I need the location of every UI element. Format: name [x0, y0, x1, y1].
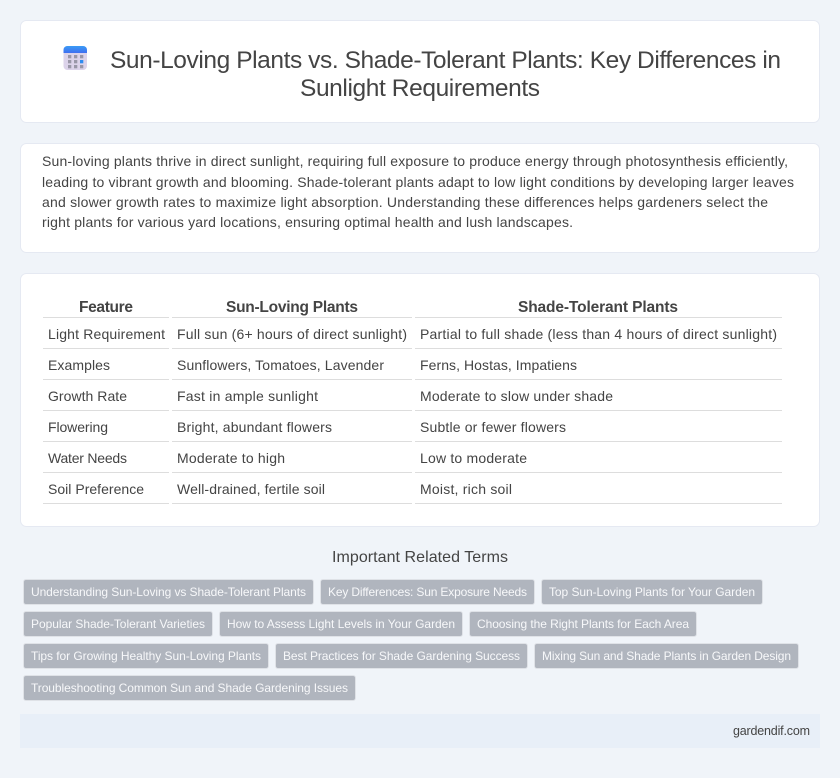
tag: Mixing Sun and Shade Plants in Garden Design — [542, 649, 791, 663]
tag — [320, 580, 534, 604]
icon: calendar — [64, 46, 87, 70]
panel: header — [20, 20, 820, 122]
tag: How to Assess Light Levels in Your Garden — [227, 617, 455, 631]
row: soil preference: Moist, rich soil — [420, 481, 512, 497]
row: light requirement: Partial to full shade (less than 4 hours of direct sunlight) — [420, 326, 777, 342]
row: flowering: Subtle or fewer flowers — [420, 419, 566, 435]
table header: Feature — [79, 299, 133, 316]
tag — [220, 612, 462, 636]
tag — [24, 676, 356, 700]
title: Sunlight Requirements — [300, 75, 540, 102]
tag: Understanding Sun-Loving vs Shade-Tolerant Plants — [31, 585, 306, 599]
row: flowering: Bright, abundant flowers — [177, 419, 332, 435]
row: light requirement: Light Requirement — [48, 326, 165, 342]
tag: Popular Shade-Tolerant Varieties — [31, 617, 205, 631]
title: Sun-Loving Plants vs. Shade-Tolerant Plants: Key Differences in — [110, 47, 781, 74]
title — [110, 47, 781, 102]
table header: Shade-Tolerant Plants — [518, 299, 678, 316]
related term tags — [24, 580, 798, 700]
row: growth rate — [48, 388, 613, 404]
tag — [542, 580, 762, 604]
row: growth rate: Fast in ample sunlight — [177, 388, 318, 404]
row: soil preference: Well-drained, fertile soil — [177, 481, 325, 497]
tag — [276, 644, 528, 668]
row: soil preference — [48, 481, 512, 497]
tag — [24, 580, 314, 604]
tag: Key Differences: Sun Exposure Needs — [328, 585, 527, 599]
row: water needs: Water Needs — [48, 450, 127, 466]
text block: introduction: and slower growth rates to maximize light absorption. Understanding these differences helps gardeners select the — [42, 194, 768, 210]
panel: comparison table — [20, 274, 820, 526]
row: examples: Examples — [48, 357, 110, 373]
tag: Troubleshooting Common Sun and Shade Gardening Issues — [31, 681, 348, 695]
row: water needs: Moderate to high — [177, 450, 285, 466]
footer — [20, 714, 820, 748]
tag: Choosing the Right Plants for Each Area — [477, 617, 689, 631]
row: growth rate: Moderate to slow under shade — [420, 388, 613, 404]
row: growth rate: Growth Rate — [48, 388, 127, 404]
tag — [24, 612, 212, 636]
text block: introduction: leading to vibrant growth and blooming. Shade-tolerant plants adapt to low light conditions by developing larger leaves — [42, 174, 794, 190]
row: water needs — [48, 450, 527, 466]
row: examples — [48, 357, 577, 373]
text block: introduction: right plants for various yard locations, ensuring optimal health and lush landscapes. — [42, 214, 573, 230]
row: light requirement — [48, 326, 777, 342]
table header: Sun-Loving Plants — [226, 299, 358, 316]
text block: introduction: Sun-loving plants thrive in direct sunlight, requiring full exposure to produce energy through photosynthesis efficiently, — [42, 153, 788, 169]
tag — [534, 644, 798, 668]
row: flowering — [48, 419, 566, 435]
row: examples: Ferns, Hostas, Impatiens — [420, 357, 577, 373]
panel: introduction — [20, 144, 820, 252]
tag: Best Practices for Shade Gardening Success — [283, 649, 520, 663]
footer: gardendif.com — [733, 724, 810, 738]
tag — [470, 612, 696, 636]
tag: Tips for Growing Healthy Sun-Loving Plants — [31, 649, 261, 663]
tag — [24, 644, 268, 668]
heading: related terms: Important Related Terms — [332, 549, 508, 566]
row: light requirement: Full sun (6+ hours of direct sunlight) — [177, 326, 407, 342]
text block: introduction — [42, 153, 794, 230]
row: flowering: Flowering — [48, 419, 108, 435]
row: soil preference: Soil Preference — [48, 481, 144, 497]
table header — [79, 299, 678, 316]
row: water needs: Low to moderate — [420, 450, 527, 466]
tag: Top Sun-Loving Plants for Your Garden — [549, 585, 755, 599]
row: examples: Sunflowers, Tomatoes, Lavender — [177, 357, 384, 373]
